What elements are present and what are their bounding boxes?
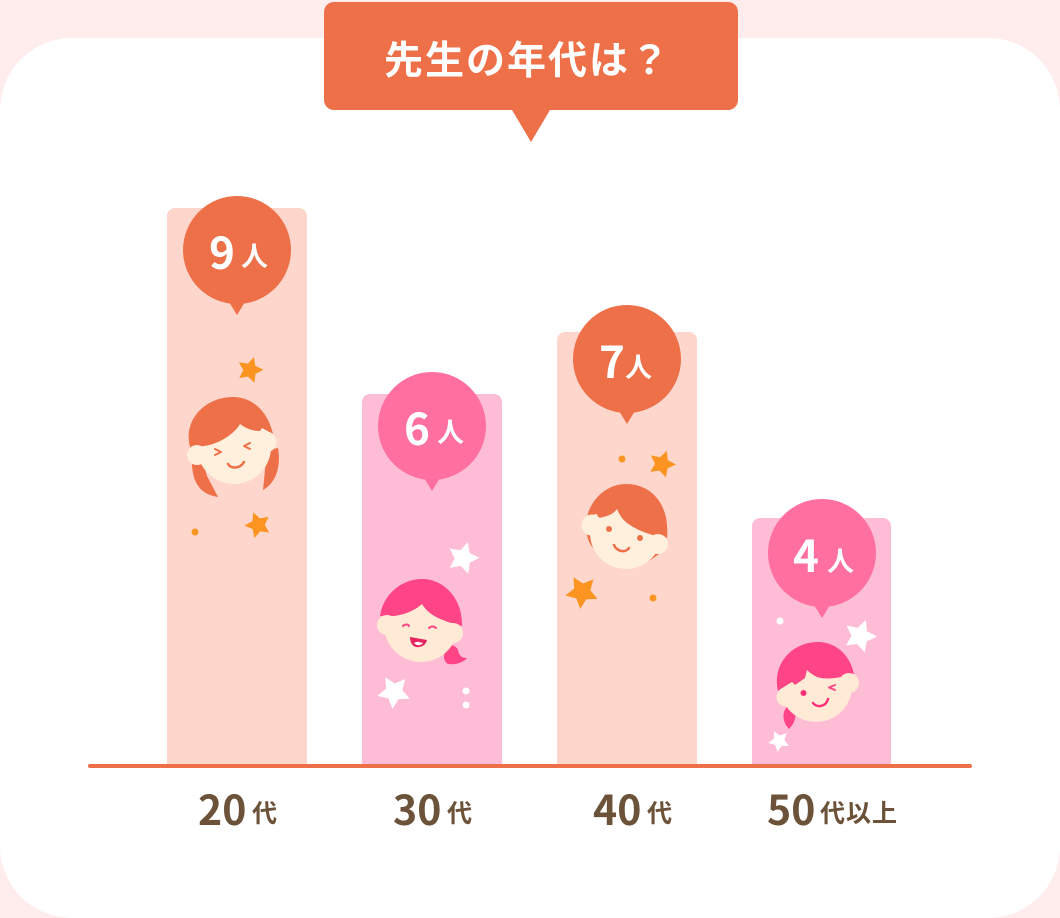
axis label: 30代: 30 <box>393 777 441 837</box>
baseline axis <box>88 764 972 768</box>
axis label: 50代以上: 50 <box>767 777 815 837</box>
icon: woman face 50s <box>776 642 859 729</box>
value bubble: 6人: 6 <box>404 394 430 458</box>
axis label: 40代: 代 <box>647 794 672 830</box>
axis label: 30代 <box>393 777 472 837</box>
value bubble: 7人: 7 <box>599 327 625 391</box>
bar: 20代 <box>167 208 307 766</box>
axis label: 40代 <box>593 777 672 837</box>
axis label: 50代以上 <box>767 777 897 837</box>
axis label: 40代: 40 <box>593 777 641 837</box>
value bubble: 9人: 人 <box>241 235 268 274</box>
bar: 30代 <box>362 394 502 766</box>
value bubble: 4人 <box>768 499 876 618</box>
value bubble: 6人 <box>378 372 486 491</box>
value bubble: 9人 <box>183 196 291 315</box>
icon: woman face 30s <box>377 579 467 664</box>
icon: man face 40s <box>582 484 668 569</box>
value bubble: 7人 <box>573 305 681 424</box>
bar: 50代以上 <box>752 518 891 766</box>
decorations: white stars and dots <box>371 538 881 754</box>
icon: woman face 20s <box>187 397 279 497</box>
axis label: 20代: 20 <box>198 777 246 837</box>
axis label: 50代以上: 代以上 <box>820 794 897 830</box>
value bubble: 4人: 4 <box>793 521 819 585</box>
value bubble: 7人: 人 <box>625 346 652 385</box>
value bubble: 4人: 人 <box>827 540 854 579</box>
axis label: 20代: 代 <box>252 794 277 830</box>
axis label: 30代: 代 <box>447 794 472 830</box>
value bubble: 6人: 人 <box>437 411 464 450</box>
axis label: 20代 <box>198 777 277 837</box>
decorations: orange stars and dots <box>192 353 679 612</box>
title banner <box>324 2 738 142</box>
bar: 40代 <box>557 332 697 766</box>
title banner: 先生の年代は？ <box>384 30 669 86</box>
value bubble: 9人: 9 <box>209 218 235 282</box>
